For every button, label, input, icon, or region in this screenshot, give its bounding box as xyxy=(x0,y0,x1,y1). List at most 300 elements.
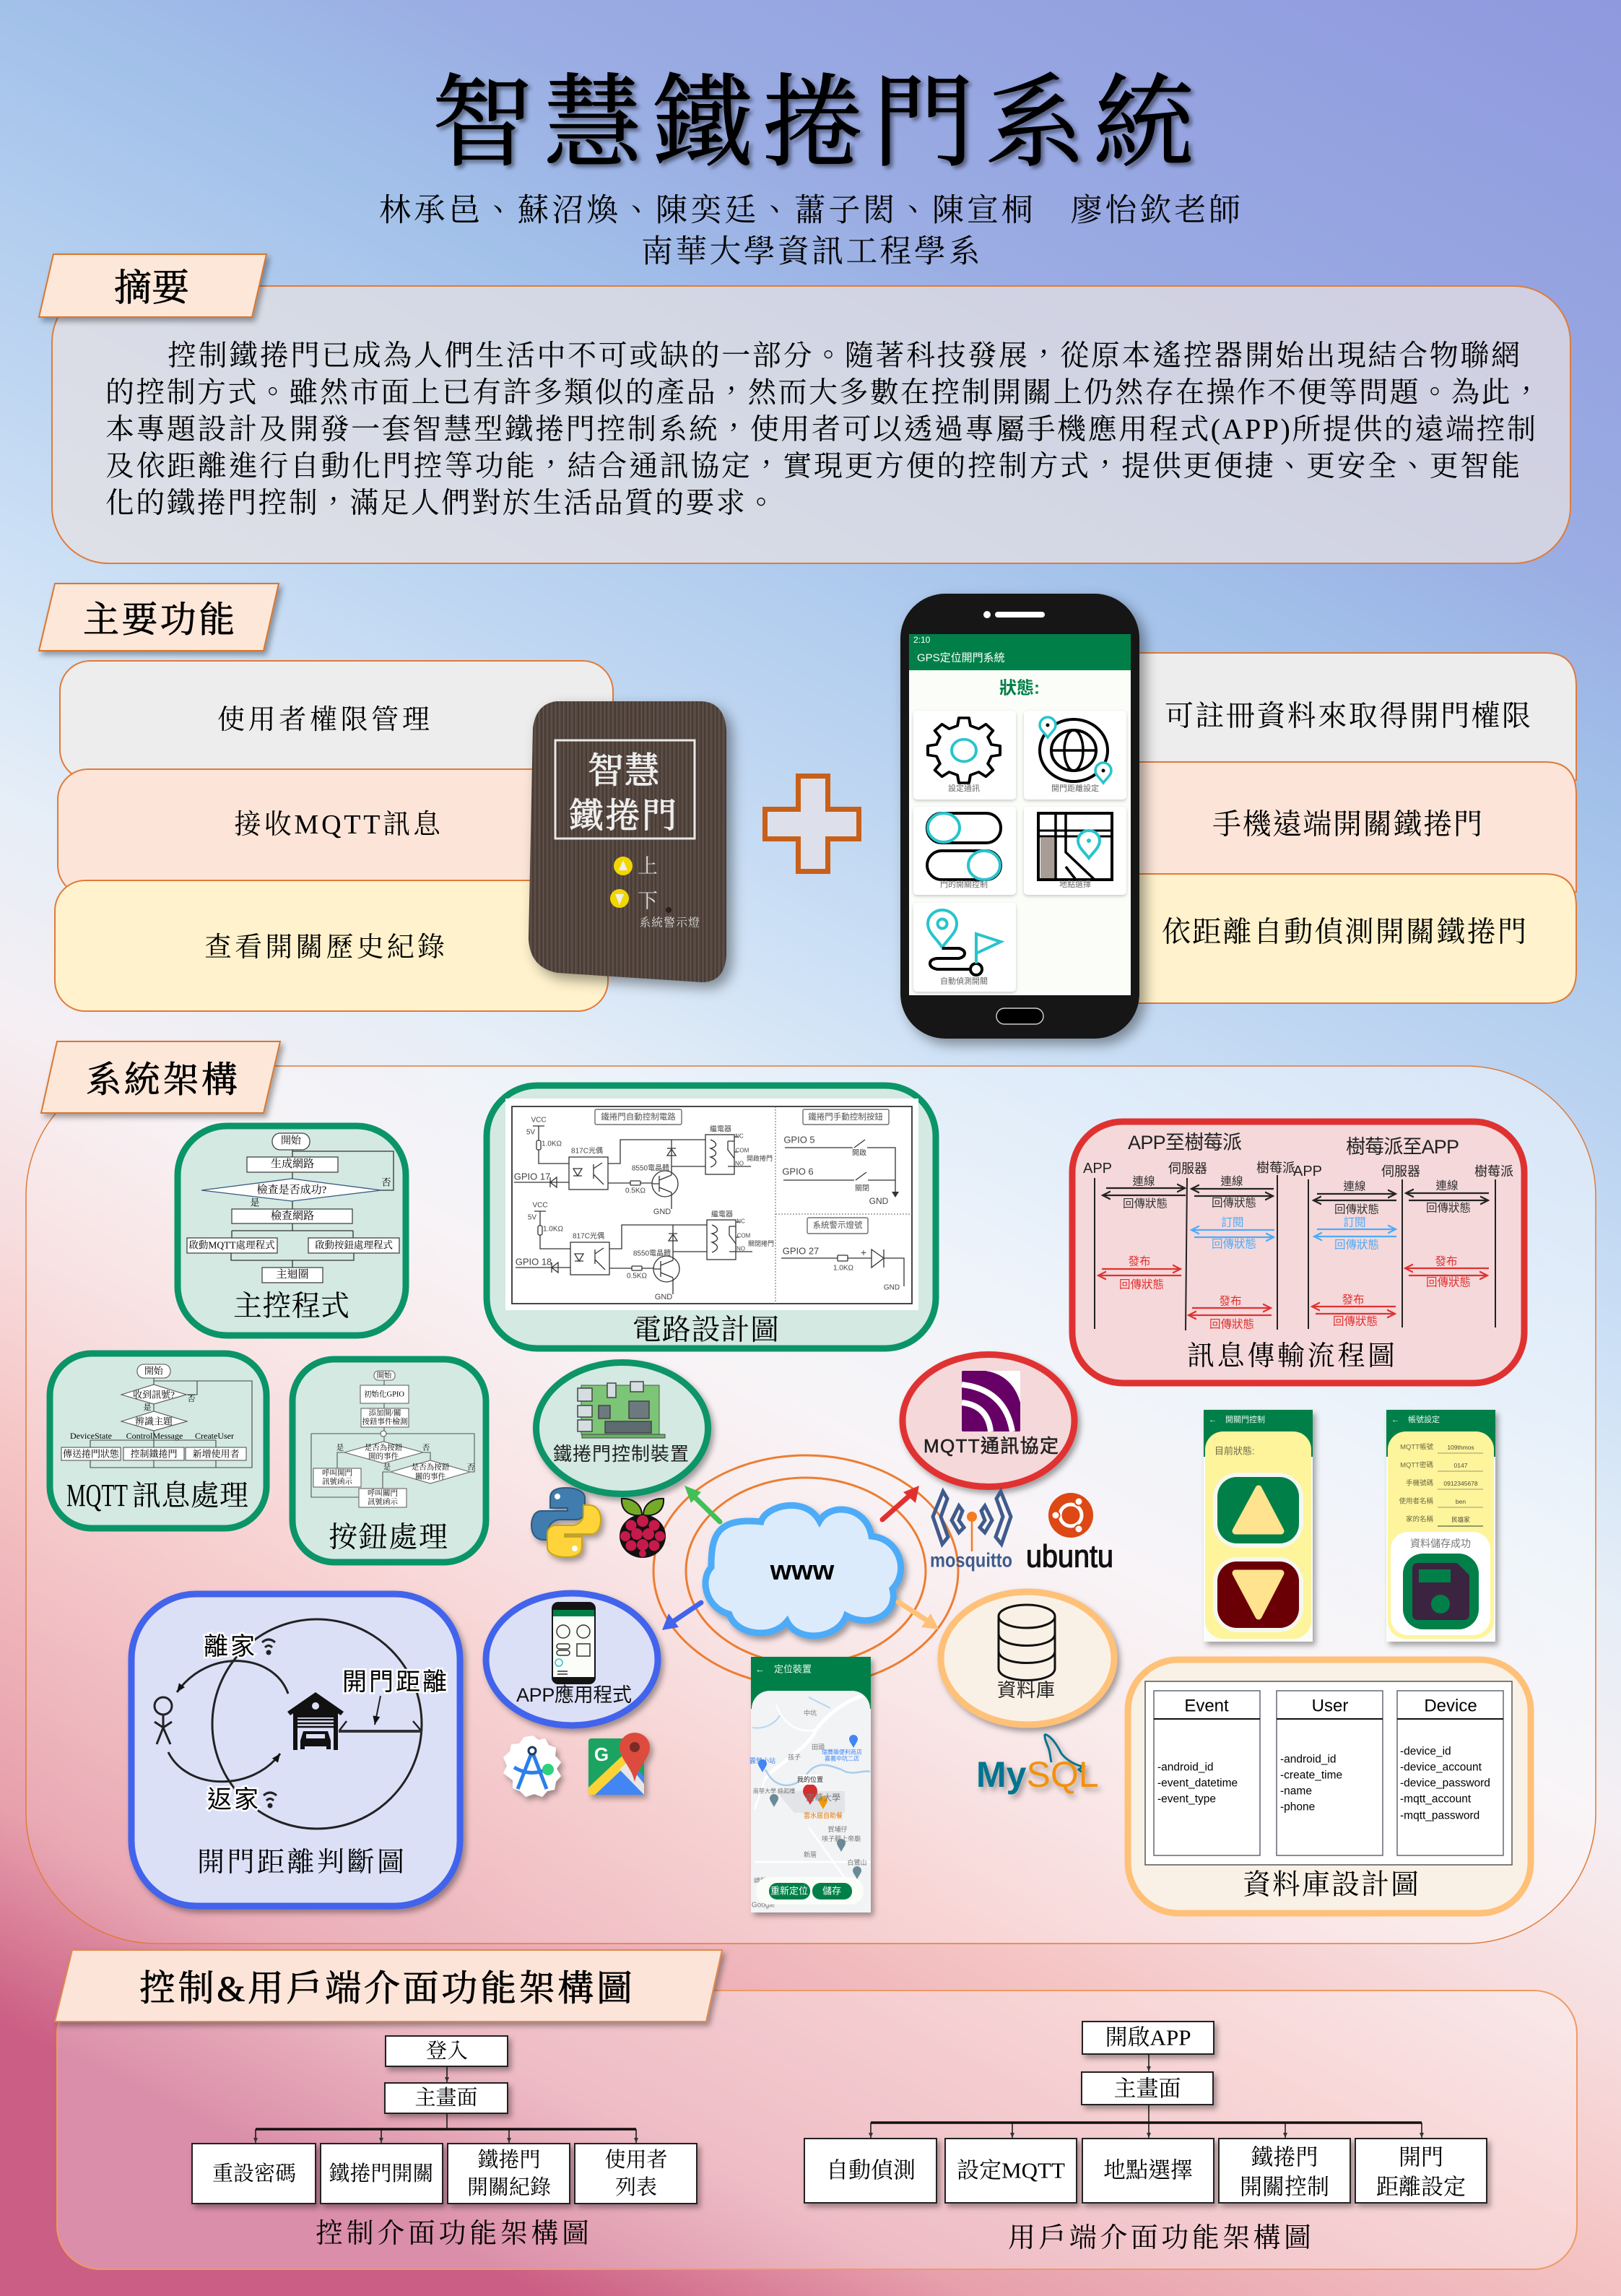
circuit: alarm LED: + xyxy=(861,1247,866,1258)
node: control device: 鐵捲門控制裝置 xyxy=(553,1443,689,1465)
app screen: account settings: 0912345678 xyxy=(1443,1480,1478,1487)
heading: 摘要 xyxy=(39,254,266,317)
feature: register xyxy=(1083,653,1576,780)
table: User xyxy=(1277,1691,1383,1855)
node: control device xyxy=(536,1362,708,1494)
table: User: -android_id xyxy=(1280,1754,1337,1765)
heading: 主要功能 xyxy=(39,584,279,651)
flowchart: buttons: 訊號函示 xyxy=(368,1496,398,1507)
arrow: to control device xyxy=(685,1486,720,1522)
chart: message sequence: APP xyxy=(1083,1161,1112,1177)
panel: abstract xyxy=(52,286,1570,563)
flowchart: main program: 生成網路 xyxy=(271,1158,314,1170)
flowchart: MQTT: 控制鐵捲門 xyxy=(130,1449,178,1459)
chart: message sequence: 連線 xyxy=(1132,1174,1155,1187)
button: door up xyxy=(1213,1473,1303,1548)
app screen: account settings xyxy=(1386,1410,1495,1642)
heading: interface architecture xyxy=(55,1950,722,2022)
panel: MQTT message handling xyxy=(50,1353,266,1528)
node: APP xyxy=(486,1593,658,1725)
table: Device: Device xyxy=(1424,1696,1477,1716)
circuit: manual buttons xyxy=(782,1134,899,1206)
app screen: account settings: 0147 xyxy=(1454,1462,1468,1469)
chart: message sequence: 伺服器 xyxy=(1168,1161,1207,1176)
circuit: manual buttons: GPIO 6 xyxy=(782,1166,814,1177)
flowchart: buttons: 訊號函示 xyxy=(322,1476,352,1486)
icon: cylinder xyxy=(999,1605,1055,1680)
heading: 主要功能: 主要功能 xyxy=(83,599,235,640)
circuit: alarm LED xyxy=(781,1245,904,1291)
chart: control interface: 列表 xyxy=(615,2175,657,2199)
app screen: account settings: MQTT帳號 xyxy=(1400,1443,1433,1452)
flowchart: buttons: 是 xyxy=(383,1463,391,1472)
circuit: relay 2: VCC xyxy=(532,1202,548,1209)
panel: database design xyxy=(1128,1660,1531,1913)
flowchart: MQTT: 否 xyxy=(188,1394,195,1403)
flowchart: MQTT: 新增使用者 xyxy=(192,1449,240,1459)
flowchart: main program: 啟動按鈕處理程式 xyxy=(315,1239,393,1251)
panel: MQTT message handling: 訊息處理 xyxy=(132,1479,248,1511)
arrow: to MQTT xyxy=(882,1486,919,1520)
circuit: relay 1: GPIO 17 xyxy=(514,1171,550,1182)
circuit: alarm LED: GPIO 27 xyxy=(783,1245,819,1257)
icon: mosquitto xyxy=(930,1491,1012,1572)
icon: mysql xyxy=(976,1734,1099,1795)
flowchart: main program xyxy=(187,1133,399,1283)
app screen: location map: 嘉義中坑二店 xyxy=(825,1755,859,1762)
app screen: door control: 目前狀態: xyxy=(1214,1446,1255,1456)
chart: control interface: 重設密碼 xyxy=(212,2162,296,2185)
chart: user interface: 自動偵測 xyxy=(826,2158,916,2183)
feature: history: 查看開關歷史紀錄 xyxy=(204,932,445,963)
chart: message sequence: 回傳狀態 xyxy=(1426,1275,1471,1288)
phone: main app screen xyxy=(900,594,1139,1039)
flowchart: main program: 啟動MQTT處理程式 xyxy=(188,1239,275,1251)
phone: main app screen: GPS定位開門系統 xyxy=(917,651,1005,664)
table: User: -create_time xyxy=(1280,1769,1342,1781)
icon: python xyxy=(531,1488,601,1557)
button: down xyxy=(610,889,658,913)
circuit: manual buttons: 關閉 xyxy=(855,1184,869,1193)
icon: garage xyxy=(287,1692,344,1750)
heading: 摘要: 摘要 xyxy=(114,269,189,309)
save card: 資料儲存成功 xyxy=(1410,1538,1471,1549)
flowchart: buttons: 是否為按鈕 xyxy=(365,1443,403,1452)
button: door down xyxy=(1213,1557,1303,1632)
app screen: location map: 我的位置 xyxy=(797,1775,823,1783)
app screen: door control: ← xyxy=(1209,1416,1217,1424)
circuit: manual buttons: GPIO 5 xyxy=(783,1134,815,1145)
circuit: relay 1: NO xyxy=(735,1160,744,1167)
app screen: location map: 孩子 xyxy=(788,1753,801,1761)
panel: MQTT message handling: MQTT xyxy=(66,1478,128,1512)
table: Device: -device_account xyxy=(1400,1761,1482,1774)
arrow: to APP xyxy=(662,1603,701,1630)
chart: open distance: 開門距離 xyxy=(342,1668,447,1696)
icon: map xyxy=(1038,813,1112,880)
chart: message sequence: 回傳狀態 xyxy=(1212,1238,1256,1251)
chart: user interface: 開關控制 xyxy=(1240,2174,1329,2200)
chart: user interface: 用戶端介面功能架構圖 xyxy=(1008,2223,1311,2253)
panel: database design: 資料庫設計圖 xyxy=(1243,1869,1419,1901)
feature: user permission: 使用者權限管理 xyxy=(217,705,430,735)
app screen: location map: 雲水居自助餐 xyxy=(804,1811,843,1819)
app screen: door control: 開關門控制 xyxy=(1225,1414,1265,1424)
chart: user interface: 地點選擇 xyxy=(1103,2158,1193,2183)
panel: button handling xyxy=(292,1359,486,1562)
phone: main app screen: 狀態: xyxy=(999,679,1040,698)
table: Device xyxy=(1397,1691,1503,1855)
chart: message sequence: 訂閱 xyxy=(1221,1216,1244,1229)
icon: route pin and flag xyxy=(928,910,1001,975)
icon: ubuntu xyxy=(1026,1493,1113,1574)
flowchart: MQTT: DeviceState xyxy=(70,1431,112,1441)
panel: circuit design xyxy=(487,1086,936,1348)
circuit: relay 2: 817C光偶 xyxy=(573,1231,604,1241)
chart: message sequence: 樹莓派至APP xyxy=(1346,1136,1459,1158)
app screen: location map: 露營小站 xyxy=(749,1756,775,1764)
title: 智慧鐵捲門系統 xyxy=(432,68,1195,180)
device: wooden controller: 鐵捲門 xyxy=(569,797,677,835)
chart: open distance: 返家 xyxy=(207,1786,258,1814)
panel: message flow xyxy=(1072,1122,1524,1383)
map buttons: 重新定位 xyxy=(770,1885,808,1897)
panel: message flow: 訊息傳輸流程圖 xyxy=(1187,1341,1395,1372)
circuit: relay 1: 開啟捲門 xyxy=(747,1154,773,1162)
icon: MQTT logo xyxy=(962,1371,1020,1431)
app screen: location map: 崎腳 xyxy=(754,1876,767,1884)
table: Event: -android_id xyxy=(1157,1761,1214,1774)
chart: db tables xyxy=(1145,1681,1512,1865)
flowchart: buttons: 呼叫開門 xyxy=(322,1468,352,1478)
circuit: relay 2: COM xyxy=(737,1232,751,1239)
chart: message sequence: 回傳狀態 xyxy=(1212,1196,1256,1209)
icon: ubuntu: ubuntu xyxy=(1026,1538,1113,1574)
flowchart: main program: 開始 xyxy=(281,1135,302,1147)
circuit: relay 1: 5V xyxy=(526,1128,535,1137)
table: User: User xyxy=(1312,1696,1348,1716)
abstract text: 本專題設計及開發一套智慧型鐵捲門控制系統，使用者可以透過專屬手機應用程式(APP)所提供的遠端控制 xyxy=(105,413,1536,445)
abstract text: 化的鐵捲門控制，滿足人們對於生活品質的要求。 xyxy=(105,487,775,519)
circuit: relay 1: 1.0KΩ xyxy=(542,1140,562,1148)
circuit: relay 2: NO xyxy=(736,1245,745,1252)
app screen: location map: 白鷺山 xyxy=(847,1858,867,1866)
flowchart: buttons: 開的事件 xyxy=(368,1452,399,1460)
chart: message sequence: 回傳狀態 xyxy=(1334,1203,1379,1216)
circuit: relay 1: 0.5KΩ xyxy=(625,1187,646,1195)
panel: distance diagram xyxy=(131,1594,460,1906)
node: MQTT protocol xyxy=(903,1355,1074,1486)
app screen: location map: 新厝 xyxy=(804,1850,817,1858)
app screen: location map: Google xyxy=(752,1901,775,1910)
circuit: relay 1: VCC xyxy=(531,1117,547,1124)
flowchart: MQTT: 是 xyxy=(143,1403,152,1412)
chart: control interface: 開關紀錄 xyxy=(467,2175,551,2199)
chart: message sequence: 回傳狀態 xyxy=(1333,1314,1378,1327)
icon: circuit board xyxy=(578,1382,665,1438)
feature: remote xyxy=(1083,762,1576,892)
feature: user permission xyxy=(60,661,613,780)
chart: message sequence: 樹莓派 xyxy=(1256,1161,1295,1175)
icon: mosquitto: mosquitto xyxy=(930,1548,1012,1572)
table: Event xyxy=(1154,1691,1260,1855)
chart: user interface: 距離設定 xyxy=(1376,2174,1466,2200)
chart: user interface: 鐵捲門 xyxy=(1251,2145,1318,2170)
chart: circuit diagram: 系統警示燈號 xyxy=(813,1220,863,1230)
chart: message sequence: 回傳狀態 xyxy=(1426,1202,1471,1215)
heading: 系統架構 xyxy=(41,1041,280,1113)
circuit: relay 1: 8550電晶體 xyxy=(632,1164,669,1173)
chart: message sequence: APP xyxy=(1293,1164,1322,1179)
feature: register: 可註冊資料來取得開門權限 xyxy=(1165,699,1531,732)
flowchart: MQTT xyxy=(61,1364,252,1468)
flowchart: buttons: 關的事件 xyxy=(415,1472,446,1481)
abstract text: 的控制方式。雖然市面上已有許多類似的產品，然而大多數在控制開關上仍然存在操作不便等問題。為此， xyxy=(105,376,1541,409)
flowchart: main program: 檢查網路 xyxy=(271,1210,314,1222)
chart: user interface: 主畫面 xyxy=(1113,2076,1181,2102)
flowchart: buttons xyxy=(311,1371,475,1507)
circuit: relay 2: 繼電器 xyxy=(711,1209,733,1219)
phone: main app screen: 地點選擇 xyxy=(1059,879,1091,889)
chart: message sequence: 連線 xyxy=(1343,1180,1366,1193)
panel: right features xyxy=(1083,653,1576,1003)
device: wooden controller: 智慧 xyxy=(588,750,660,791)
table: Device: -device_id xyxy=(1400,1745,1451,1758)
node: APP: APP應用程式 xyxy=(516,1684,632,1706)
phone: main app screen: 開門距離設定 xyxy=(1051,783,1099,793)
flowchart: main program: 是 xyxy=(250,1197,260,1208)
flowchart: main program: 否 xyxy=(381,1177,391,1187)
feature: MQTT xyxy=(58,769,611,896)
flowchart: main program: 主迴圈 xyxy=(276,1268,309,1281)
app screen: account settings: 帳號設定 xyxy=(1408,1414,1440,1424)
flowchart: buttons: 是否為按鈕 xyxy=(412,1462,450,1472)
chart: message sequence: 訂閱 xyxy=(1343,1216,1366,1229)
circuit: relay 2: GPIO 18 xyxy=(516,1257,552,1267)
circuit: relay 1: GND xyxy=(653,1208,671,1216)
flowchart: buttons: 否 xyxy=(422,1443,430,1452)
icon: plus xyxy=(765,776,859,871)
circuit: alarm LED: 1.0KΩ xyxy=(833,1264,854,1273)
app screen: account settings: 使用者名稱 xyxy=(1399,1496,1433,1505)
abstract text: 及依距離進行自動化門控等功能，結合通訊協定，實現更方便的控制方式，提供更便捷、更安全、更智能 xyxy=(105,449,1520,482)
chart: control interface: 登入 xyxy=(426,2039,468,2063)
circuit: relay 1: NC xyxy=(735,1132,744,1140)
app screen: location map: 埃子腳上帝廟 xyxy=(822,1834,861,1842)
phone: main app screen: 設定通訊 xyxy=(948,783,980,793)
circuit: manual buttons: GND xyxy=(869,1196,889,1206)
chart: control interface xyxy=(192,2036,697,2249)
flowchart: buttons: 按鈕事件檢測 xyxy=(362,1417,407,1426)
flowchart: MQTT: ControlMessage xyxy=(126,1431,183,1441)
app screen: location map xyxy=(749,1657,871,1912)
app screen: location map: 瑞豐雜便利商店 xyxy=(822,1748,862,1755)
chart: message sequence: 發布 xyxy=(1342,1293,1365,1306)
panel: main program flowchart xyxy=(178,1126,406,1335)
chart: circuit diagram xyxy=(505,1099,918,1310)
circuit: relay 1: 繼電器 xyxy=(710,1124,731,1134)
icon: google maps xyxy=(588,1733,650,1795)
circuit: manual buttons: 開啟 xyxy=(852,1148,866,1157)
map buttons xyxy=(756,1877,864,1905)
flowchart: buttons: 添加開/關 xyxy=(369,1408,401,1417)
circuit: relay 1 xyxy=(514,1117,773,1216)
heading: interface architecture: 控制&用戶端介面功能架構圖 xyxy=(139,1968,633,2009)
flowchart: MQTT: 開始 xyxy=(144,1365,164,1377)
icon: mysql: MySQL xyxy=(976,1754,1099,1795)
chart: message sequence: APP至樹莓派 xyxy=(1128,1132,1242,1153)
circuit: relay 2: GND xyxy=(655,1293,672,1301)
panel: circuit design: 電路設計圖 xyxy=(633,1313,779,1346)
icon: cloud www: www xyxy=(770,1556,835,1586)
flowchart: MQTT: 傳送捲門狀態 xyxy=(63,1449,120,1459)
icon: globe distance xyxy=(1040,717,1111,783)
icon: mini phone xyxy=(552,1602,596,1684)
chart: message sequence: 回傳狀態 xyxy=(1119,1278,1164,1291)
node: database: 資料庫 xyxy=(997,1679,1055,1701)
save card xyxy=(1391,1532,1490,1635)
flowchart: MQTT: 收到訊號? xyxy=(133,1390,175,1400)
chart: user interface xyxy=(804,2022,1487,2253)
table: Event: Event xyxy=(1184,1696,1229,1716)
icon: person xyxy=(155,1697,172,1744)
chart: message sequence: 發布 xyxy=(1435,1255,1458,1268)
chart: control interface: 鐵捲門 xyxy=(477,2148,541,2172)
panel: interface architecture xyxy=(57,1990,1577,2269)
app screen: location map: ← xyxy=(755,1664,765,1674)
node: MQTT protocol: MQTT通訊協定 xyxy=(924,1435,1059,1457)
app screen: account settings: ← xyxy=(1391,1416,1399,1424)
app screen: account settings: 109thmos xyxy=(1447,1444,1474,1451)
panel: left features xyxy=(55,661,613,1011)
chart: message sequence: 樹莓派 xyxy=(1474,1164,1513,1179)
chart: user interface: 開門 xyxy=(1399,2145,1443,2170)
table: Device: -device_password xyxy=(1400,1777,1490,1790)
button: up xyxy=(614,855,658,878)
chart: open distance: 離家 xyxy=(204,1633,255,1660)
device: wooden controller: 系統警示燈 xyxy=(639,916,700,929)
app screen: account settings: 家的名稱 xyxy=(1406,1515,1433,1524)
icon: cloud www xyxy=(705,1505,901,1636)
feature: remote: 手機遠端開關鐵捲門 xyxy=(1212,807,1482,841)
abstract text xyxy=(105,339,1541,519)
icon: raspberry xyxy=(620,1499,666,1558)
app screen: door control xyxy=(1204,1410,1313,1642)
authors: 林承邑、蘇沼煥、陳奕廷、蕭子閎、陳宣桐 廖怡欽老師 xyxy=(379,192,1240,228)
chart: circuit diagram: 鐵捲門自動控制電路 xyxy=(601,1112,676,1122)
circuit: relay 1: 817C光偶 xyxy=(571,1145,603,1156)
icon: android studio xyxy=(503,1736,561,1797)
chart: message sequence xyxy=(1083,1132,1513,1330)
phone: main app screen: 2:10 xyxy=(913,635,931,645)
node: database xyxy=(941,1592,1114,1725)
app screen: account settings: ben xyxy=(1456,1498,1466,1505)
chart: user interface: 開啟APP xyxy=(1105,2025,1191,2050)
boxes: control xyxy=(192,2036,697,2204)
app screen: location map: 南華大學 xyxy=(806,1792,840,1803)
app screen: account settings: 手機號碼 xyxy=(1406,1479,1433,1488)
map roads and river xyxy=(752,1696,870,1878)
flowchart: buttons: 否 xyxy=(467,1463,475,1472)
app screen: account settings: 民雄家 xyxy=(1451,1516,1470,1523)
table: Event: -event_type xyxy=(1157,1793,1216,1806)
icon: gear xyxy=(928,718,1000,783)
abstract text: 控制鐵捲門已成為人們生活中不可或缺的一部分。隨著科技發展，從原本遙控器開始出現結合物聯網 xyxy=(168,339,1520,371)
app screen: location map: 賀埔仔 xyxy=(827,1825,848,1833)
boxes: user xyxy=(804,2022,1487,2203)
phone: main app screen: 門的開關控制 xyxy=(940,879,988,889)
panel: distance diagram: 開門距離判斷圖 xyxy=(197,1847,404,1878)
heading: 系統架構: 系統架構 xyxy=(85,1060,238,1100)
chart: message sequence: 回傳狀態 xyxy=(1334,1238,1379,1251)
flowchart: buttons: 初始化GPIO xyxy=(364,1390,404,1398)
button: down: 下 xyxy=(638,890,658,913)
orbit rings xyxy=(653,1455,958,1686)
chart: message sequence: 發布 xyxy=(1219,1294,1242,1307)
map buttons: 儲存 xyxy=(822,1885,841,1897)
table: User: -phone xyxy=(1280,1801,1315,1813)
feature: distance xyxy=(1083,874,1576,1003)
circuit: relay 2: 5V xyxy=(528,1213,536,1222)
panel: button handling: 按鈕處理 xyxy=(329,1521,448,1553)
circuit: relay 2: 8550電晶體 xyxy=(633,1249,671,1258)
panel: main program flowchart: 主控程式 xyxy=(233,1290,349,1322)
chart: user interface: 設定MQTT xyxy=(957,2158,1065,2183)
chart: control interface: 鐵捲門開關 xyxy=(329,2162,434,2185)
table: User: -name xyxy=(1280,1785,1312,1797)
chart: circuit diagram: 鐵捲門手動控制按鈕 xyxy=(808,1112,883,1122)
panel: system architecture backdrop xyxy=(26,1066,1596,1944)
flowchart: MQTT: 辨識主題 xyxy=(135,1416,173,1427)
chart: control interface: 主畫面 xyxy=(414,2086,478,2110)
chart: message sequence: 回傳狀態 xyxy=(1123,1197,1168,1210)
feature: MQTT: 接收MQTT訊息 xyxy=(234,810,441,840)
feature: distance: 依距離自動偵測開關鐵捲門 xyxy=(1162,916,1526,948)
icon: toggles xyxy=(927,813,1001,880)
table: Device: -mqtt_password xyxy=(1400,1810,1479,1821)
icon: google maps: G xyxy=(594,1743,609,1765)
circuit: relay 1: COM xyxy=(736,1147,749,1154)
circuit: relay 2: 1.0KΩ xyxy=(543,1225,564,1234)
table: Event: -event_datetime xyxy=(1157,1777,1238,1790)
feature: history xyxy=(55,880,608,1011)
device: wooden controller xyxy=(529,701,726,982)
app screen: location map: 中坑 xyxy=(804,1709,817,1717)
circuit: relay 2 xyxy=(516,1202,774,1301)
flowchart: main program: 檢查是否成功? xyxy=(257,1184,327,1196)
flowchart: buttons: 是 xyxy=(336,1443,344,1452)
arrow: to database xyxy=(898,1602,939,1629)
app screen: location map: 田頭 xyxy=(812,1743,825,1751)
circuit: relay 2: 0.5KΩ xyxy=(627,1273,648,1280)
chart: open distance xyxy=(155,1619,447,1829)
circuit: relay 2: 關閉捲門 xyxy=(748,1239,774,1247)
flowchart: MQTT: CreateUser xyxy=(195,1431,234,1441)
circuit: relay 2: NC xyxy=(736,1218,745,1225)
chart: message sequence: 發布 xyxy=(1128,1255,1151,1268)
chart: message sequence: 連線 xyxy=(1435,1179,1459,1192)
flowchart: buttons: 呼叫關門 xyxy=(368,1488,398,1498)
chart: message sequence: 伺服器 xyxy=(1381,1164,1420,1179)
app screen: location map: 定位裝置 xyxy=(774,1664,812,1674)
chart: control interface: 控制介面功能架構圖 xyxy=(316,2219,589,2249)
department: 南華大學資訊工程學系 xyxy=(641,234,980,269)
flowchart: buttons: 開始 xyxy=(377,1371,392,1379)
button: up: 上 xyxy=(638,855,658,878)
chart: control interface: 使用者 xyxy=(604,2148,668,2172)
app screen: account settings: MQTT密碼 xyxy=(1400,1460,1433,1469)
table: Device: -mqtt_account xyxy=(1400,1793,1472,1806)
